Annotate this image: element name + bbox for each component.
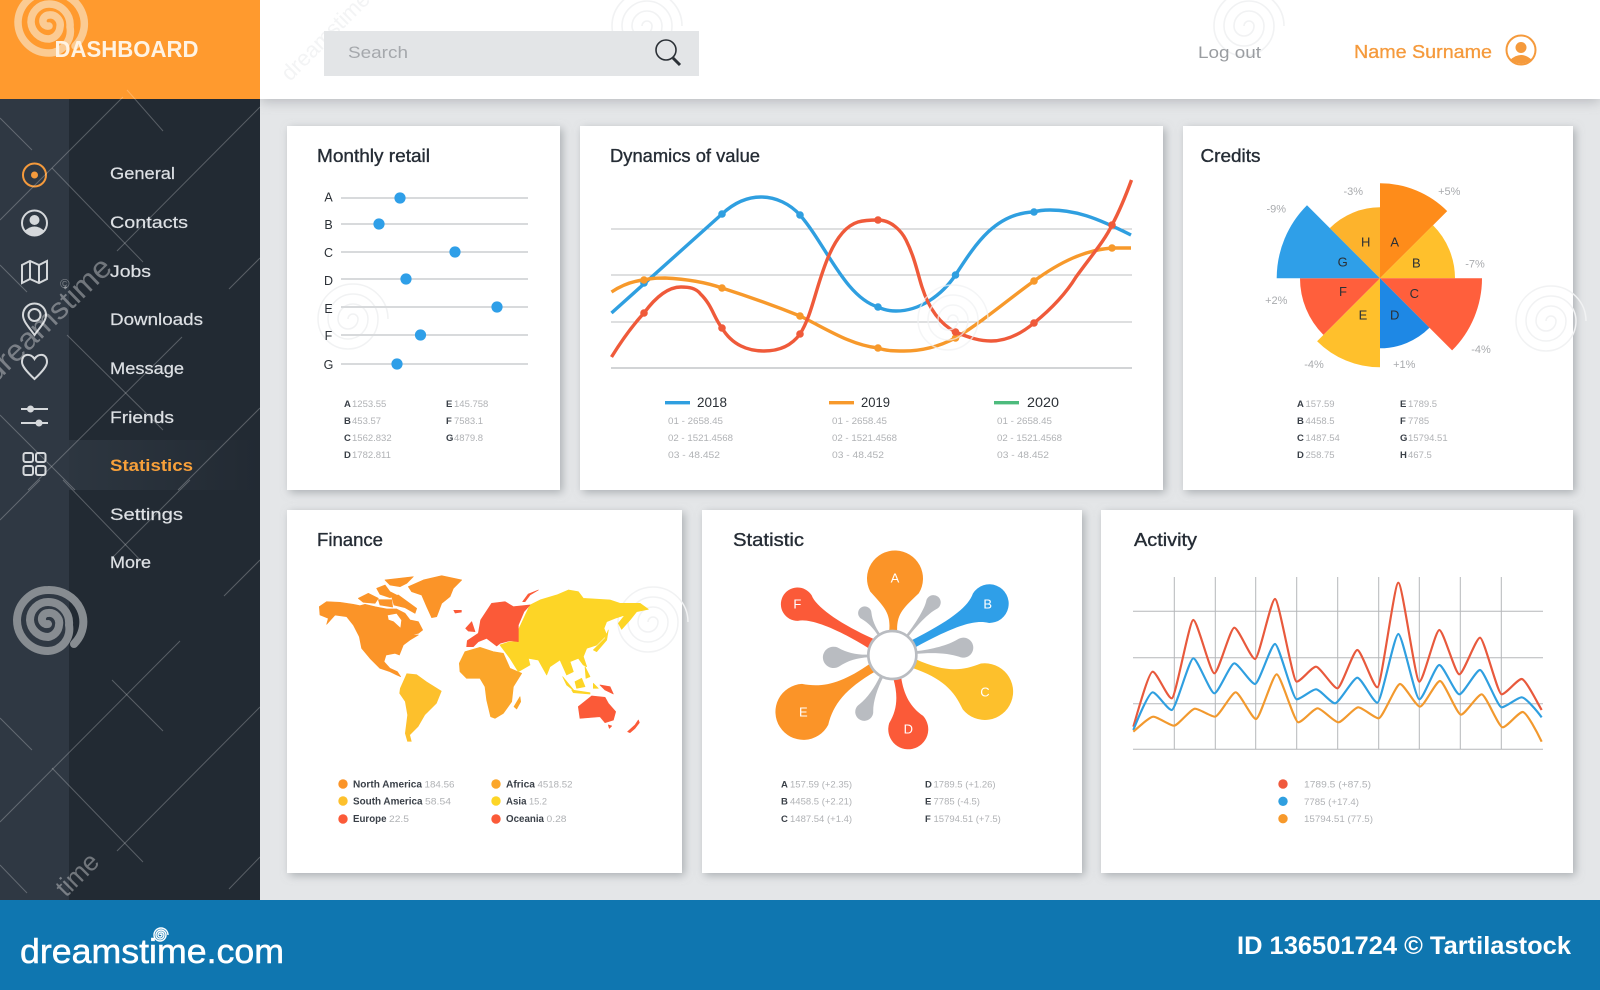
panel: activity: [1101, 510, 1573, 873]
values table: [1297, 399, 1448, 461]
values table: 1487.54 (+1.4): [790, 814, 852, 825]
polar area chart: -4%: [1304, 359, 1324, 371]
watermark text lower: time: [49, 846, 105, 902]
polar area chart: E: [1359, 308, 1368, 322]
values table: 1789.5: [1408, 399, 1437, 410]
polar area chart: H: [1361, 234, 1370, 250]
values table: D: [925, 780, 932, 790]
legend 2019: [829, 394, 897, 461]
active menu row: [69, 440, 259, 490]
polar area chart: G: [1338, 254, 1348, 270]
values table: H: [1400, 450, 1407, 461]
radial petal chart: F: [793, 596, 801, 612]
menu list: [110, 164, 203, 572]
panel: monthly retail: [287, 126, 560, 490]
line chart: [611, 180, 1132, 368]
icon: map: [22, 261, 47, 283]
menu list: Statistics: [110, 456, 193, 475]
values table: 1789.5 (+1.26): [934, 780, 996, 790]
values table: [344, 399, 488, 461]
heading: Dynamics of value: [610, 146, 760, 166]
values table: 157.59: [1306, 399, 1335, 410]
values table: C: [781, 814, 788, 825]
menu list: Message: [110, 359, 184, 378]
values table: G: [1400, 433, 1407, 444]
polar area chart: +1%: [1393, 359, 1416, 371]
icon: contact: [22, 210, 47, 236]
chart legend: [1278, 779, 1373, 825]
values table: A: [344, 399, 351, 410]
values table: 7583.1: [454, 416, 483, 427]
slider chart: [324, 190, 528, 372]
watermark copyright mark: ©: [60, 276, 70, 291]
values table: C: [344, 433, 351, 444]
legend 2020: 01 - 2658.45: [997, 416, 1052, 427]
polar area chart: [1265, 183, 1491, 371]
values table: 1782.811: [352, 450, 391, 461]
map legend: Europe: [353, 814, 387, 825]
heading: Credits: [1200, 146, 1260, 166]
multi-line chart: [1133, 577, 1543, 749]
map legend: 58.54: [425, 796, 451, 808]
menu list: More: [110, 553, 151, 572]
polar area chart: +5%: [1438, 186, 1461, 198]
footer bar: [0, 900, 1600, 990]
panel: finance: [287, 510, 688, 873]
polar area chart: B: [1412, 256, 1421, 270]
map legend: 4518.52: [538, 780, 572, 790]
values table: 1253.55: [352, 399, 386, 410]
values table: 15794.51 (+7.5): [934, 814, 1001, 825]
icon: heart: [22, 355, 47, 379]
values table: 7785 (-4.5): [934, 796, 980, 808]
polar area chart: -7%: [1465, 258, 1485, 270]
slider chart: F: [325, 329, 333, 343]
panel: credits: [1183, 126, 1586, 490]
legend 2018: 03 - 48.452: [668, 450, 720, 461]
values table: [781, 780, 1001, 825]
icon: target: [23, 164, 46, 186]
values table: 145.758: [454, 399, 488, 410]
icon: sliders: [21, 406, 48, 426]
footer logo: dreamstime.com: [20, 933, 284, 971]
panel: dynamics of value: [580, 126, 1163, 490]
chart legend: 15794.51 (77.5): [1304, 814, 1373, 825]
log out link: Log out: [1198, 43, 1261, 62]
slider chart: A: [324, 190, 333, 204]
values table: E: [446, 399, 452, 410]
legend 2020: 2020: [1027, 394, 1059, 410]
slider chart: D: [324, 274, 333, 288]
values table: 258.75: [1306, 450, 1335, 461]
values table: 4879.8: [454, 433, 483, 444]
map legend: [338, 779, 572, 825]
map legend: Africa: [506, 780, 535, 790]
legend 2018: 02 - 1521.4568: [668, 433, 733, 444]
polar area chart: A: [1390, 234, 1399, 250]
search box: Search: [348, 43, 408, 62]
slider chart: E: [324, 302, 333, 316]
map legend: South America: [353, 796, 423, 808]
radial petal chart: E: [799, 704, 808, 720]
radial petal chart: B: [983, 596, 992, 612]
legend 2019: 01 - 2658.45: [832, 416, 887, 427]
map legend: Oceania: [506, 814, 544, 825]
values table: B: [1297, 416, 1304, 427]
map legend: 22.5: [389, 814, 409, 825]
watermark spiral: [17, 590, 83, 651]
icon: footer spiral: [154, 928, 168, 941]
values table: 15794.51: [1408, 433, 1448, 444]
legend 2018: 2018: [697, 394, 727, 410]
values table: A: [1297, 399, 1304, 410]
values table: D: [344, 450, 351, 461]
legend 2019: 02 - 1521.4568: [832, 433, 897, 444]
values table: 4458.5 (+2.21): [790, 796, 852, 808]
values table: E: [1400, 399, 1406, 410]
polar area chart: F: [1339, 284, 1347, 299]
legend 2019: 2019: [861, 394, 890, 410]
heading: Finance: [317, 530, 383, 550]
legend 2019: 03 - 48.452: [832, 450, 884, 461]
chart legend: 7785 (+17.4): [1304, 797, 1359, 808]
values table: F: [925, 814, 931, 825]
polar area chart: -3%: [1344, 186, 1363, 198]
values table: 1487.54: [1306, 433, 1340, 444]
radial petal chart: C: [980, 684, 990, 700]
polar area chart: C: [1410, 286, 1419, 301]
map legend: 15.2: [529, 796, 547, 808]
values table: B: [781, 796, 788, 808]
heading: Monthly retail: [317, 146, 430, 166]
panel: statistic: [702, 510, 1082, 873]
sidebar: [0, 0, 260, 902]
polar area chart: -9%: [1267, 204, 1286, 216]
values table: D: [1297, 450, 1304, 461]
values table: A: [781, 780, 788, 790]
slider chart: C: [324, 246, 333, 260]
polar area chart: -4%: [1471, 344, 1491, 356]
values table: 4458.5: [1306, 416, 1335, 427]
values table: 467.5: [1408, 450, 1432, 461]
polar area chart: D: [1390, 308, 1399, 322]
legend 2020: 02 - 1521.4568: [997, 433, 1062, 444]
legend 2020: 03 - 48.452: [997, 450, 1049, 461]
values table: 453.57: [352, 416, 381, 427]
heading: Activity: [1134, 530, 1197, 550]
user name: Name Surname: [1354, 42, 1492, 62]
world map: [319, 576, 648, 742]
values table: 1562.832: [352, 433, 392, 444]
logo block: DASHBOARD: [54, 36, 198, 62]
icon: user avatar: [1506, 36, 1536, 64]
footer credit: ID 136501724 © Tartilastock: [1237, 932, 1571, 960]
map legend: 184.56: [424, 780, 454, 790]
radial petal chart: [765, 550, 1022, 753]
values table: F: [1400, 416, 1406, 427]
search box: [324, 31, 699, 76]
radial petal chart: A: [891, 570, 900, 586]
legend 2020: [994, 394, 1062, 461]
menu list: Downloads: [110, 310, 203, 329]
menu list: Jobs: [110, 262, 151, 281]
logo block: [0, 0, 260, 99]
map legend: North America: [353, 780, 422, 790]
chart legend: 1789.5 (+87.5): [1304, 780, 1371, 790]
values table: G: [446, 433, 453, 444]
menu list: General: [110, 164, 175, 183]
polar area chart: +2%: [1265, 295, 1288, 307]
heading: Statistic: [733, 530, 804, 550]
menu list: Settings: [110, 505, 183, 524]
map legend: Asia: [506, 796, 527, 808]
values table: E: [925, 796, 931, 808]
values table: B: [344, 416, 351, 427]
slider chart: B: [324, 218, 333, 232]
icon: grid: [24, 453, 46, 475]
values table: C: [1297, 433, 1304, 444]
menu list: Friends: [110, 408, 174, 427]
icon: location pin: [23, 304, 46, 335]
radial petal chart: D: [904, 722, 913, 736]
legend 2018: [665, 394, 733, 461]
top header bar: [260, 0, 1600, 99]
slider chart: G: [324, 358, 333, 372]
values table: 157.59 (+2.35): [790, 780, 852, 790]
values table: F: [446, 416, 452, 427]
values table: 7785: [1408, 416, 1429, 427]
legend 2018: 01 - 2658.45: [668, 416, 723, 427]
map legend: 0.28: [546, 814, 566, 825]
menu list: Contacts: [110, 213, 188, 232]
